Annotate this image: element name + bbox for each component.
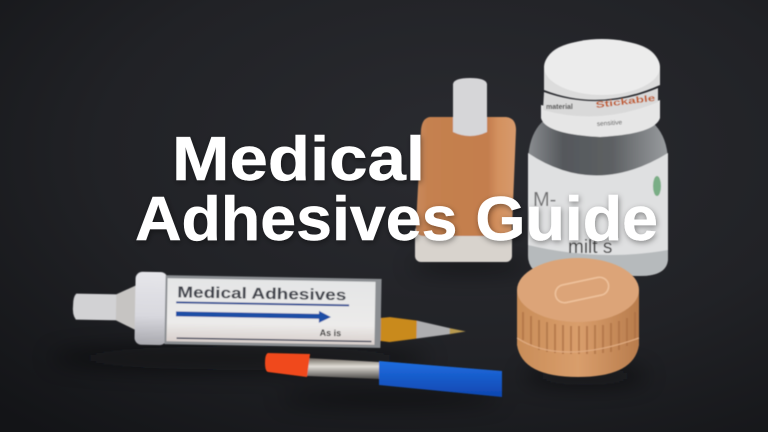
- title line 2: Adhesives Guide: [135, 185, 658, 254]
- jar lid: [544, 40, 660, 100]
- needle tip: [450, 328, 466, 334]
- orange cap: [265, 353, 310, 377]
- amber hub: [380, 317, 417, 343]
- jar label: [528, 153, 668, 255]
- cap top: [517, 258, 639, 322]
- product shadows: [50, 260, 647, 405]
- blue barrel: [379, 361, 502, 397]
- jar glass body: [528, 122, 668, 276]
- green seal: [653, 176, 661, 196]
- jar label text: M-: [533, 189, 556, 211]
- cap ribs: [523, 312, 635, 354]
- grey cone: [417, 321, 450, 339]
- title: [135, 125, 658, 254]
- glass jar: milt s: [568, 237, 612, 258]
- jar lower glass: [528, 240, 668, 276]
- glass jar: [528, 39, 668, 276]
- metal section: [307, 358, 379, 379]
- tube label: [166, 278, 376, 345]
- tube body: [164, 275, 382, 348]
- glass jar: sensitive: [597, 119, 623, 128]
- jar lower lid band: [541, 100, 660, 137]
- cap lower rim: [517, 338, 639, 352]
- bottle body: [416, 117, 516, 236]
- jar middle lid band: [543, 88, 658, 116]
- lower rule: [177, 337, 372, 342]
- title line 1: Medical: [172, 125, 425, 194]
- bottle base: [415, 225, 512, 262]
- bottle cap: [453, 78, 487, 136]
- orange ribbed cap: [517, 258, 639, 377]
- cap side: [517, 290, 639, 377]
- pen with orange cap and blue barrel: [265, 353, 502, 397]
- blue arrow: [176, 308, 331, 323]
- glass jar: Stickable: [595, 93, 656, 110]
- peach dropper bottle: [415, 78, 516, 262]
- embossed logo: [554, 276, 610, 304]
- tip cap: [73, 294, 116, 320]
- lid printed text: material: [546, 104, 573, 111]
- jar lid top: [544, 39, 660, 95]
- collar: [134, 272, 168, 345]
- tube label title: Medical Adhesives: [177, 284, 346, 304]
- tip cone: [116, 285, 135, 330]
- small label text: As is: [320, 328, 341, 338]
- syringe tube: [72, 271, 467, 350]
- rule line: [176, 301, 349, 306]
